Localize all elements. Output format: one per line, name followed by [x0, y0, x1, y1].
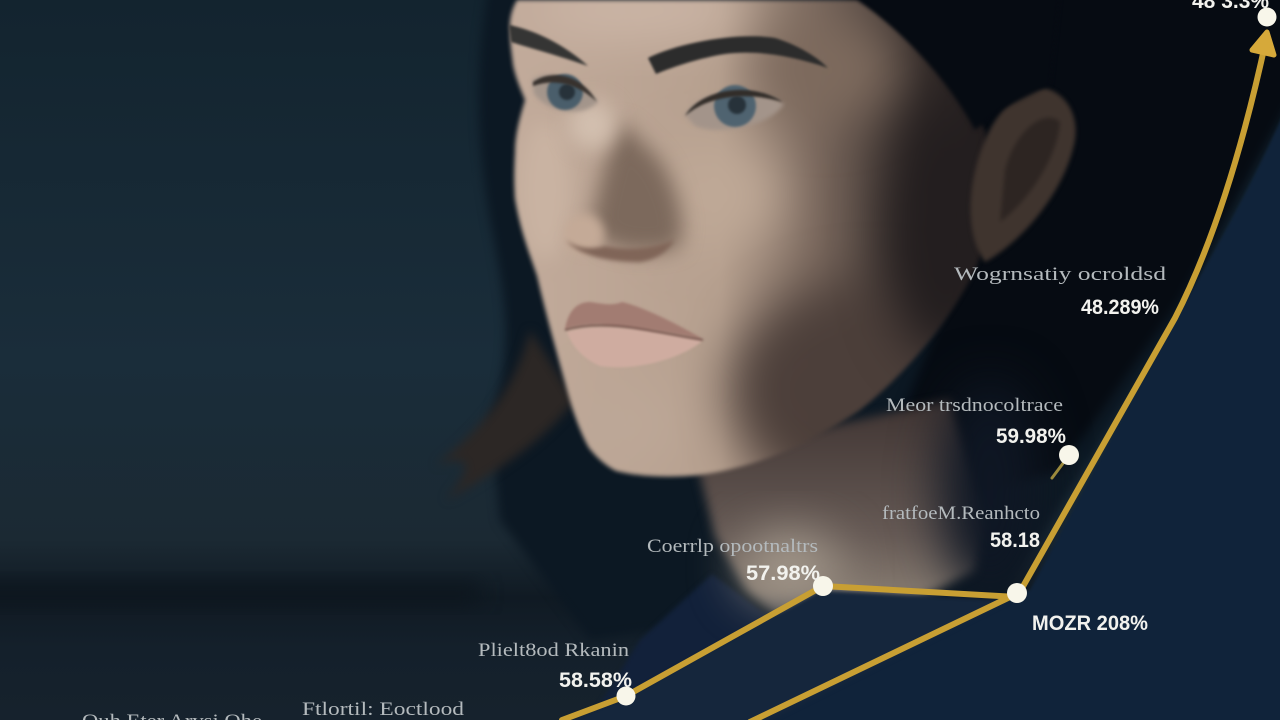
neck: [695, 400, 985, 625]
line chart: [562, 32, 1274, 720]
neck highlight: [740, 532, 840, 600]
label: 58.58%: 58.58%: [559, 669, 632, 692]
label: 59.98%: [886, 395, 1066, 448]
label: lower middle: Ftlortil: Eoctlood: [302, 699, 465, 720]
main gold line: [562, 40, 1266, 720]
hair over forehead, right: [850, 0, 1060, 130]
nose bridge light: [568, 101, 616, 149]
chart markers: [616, 8, 1276, 706]
label: 57.98%: [647, 536, 820, 585]
label: 58.58%: Plielt8od Rkanin: [478, 640, 630, 661]
label: 48.28%: [954, 264, 1167, 319]
portrait: [436, 0, 1280, 720]
hair strands, left: [436, 330, 575, 500]
label: MOZR 208%: MOZR 208%: [1032, 612, 1148, 635]
label: 59.98%: 59.98%: [996, 425, 1066, 448]
label: 58.18: [882, 503, 1040, 552]
background shadow band: [0, 582, 480, 604]
nostril shadow: [566, 240, 674, 262]
face: [506, 0, 986, 480]
sweater below first line: [560, 590, 1010, 720]
dark clothing: [590, 574, 1100, 720]
neck right shadow: [940, 380, 1040, 600]
right eyebrow: [648, 36, 828, 74]
face shading: [530, 0, 750, 40]
stub near marker: [1052, 462, 1064, 478]
hair back: [479, 0, 1280, 640]
label: 59.98%: Meor trsdnocoltrace: [886, 395, 1063, 416]
label: 58.18: fratfoeM.Reanhcto: [882, 503, 1040, 524]
label: 58.58%: [478, 640, 632, 692]
left eye: [532, 74, 598, 112]
label: 48.28%: Wogrnsatiy ocroldsd: [954, 264, 1167, 285]
arrow head: [1252, 32, 1274, 55]
label: 48.28%: 48.289%: [1081, 296, 1159, 319]
right eye: [685, 85, 784, 130]
left eyebrow: [509, 25, 588, 66]
nose tip: [564, 214, 604, 254]
lips: [565, 302, 703, 367]
nose shadow: [592, 122, 682, 252]
nose: [564, 101, 682, 262]
secondary gold line: [750, 597, 1010, 720]
label: 57.98%: Coerrlp opootnaltrs: [647, 536, 818, 557]
label: 57.98%: 57.98%: [746, 562, 820, 585]
navy panel under chart line: [760, 100, 1280, 720]
label: 58.18: 58.18: [990, 529, 1040, 552]
ear: [971, 88, 1076, 262]
